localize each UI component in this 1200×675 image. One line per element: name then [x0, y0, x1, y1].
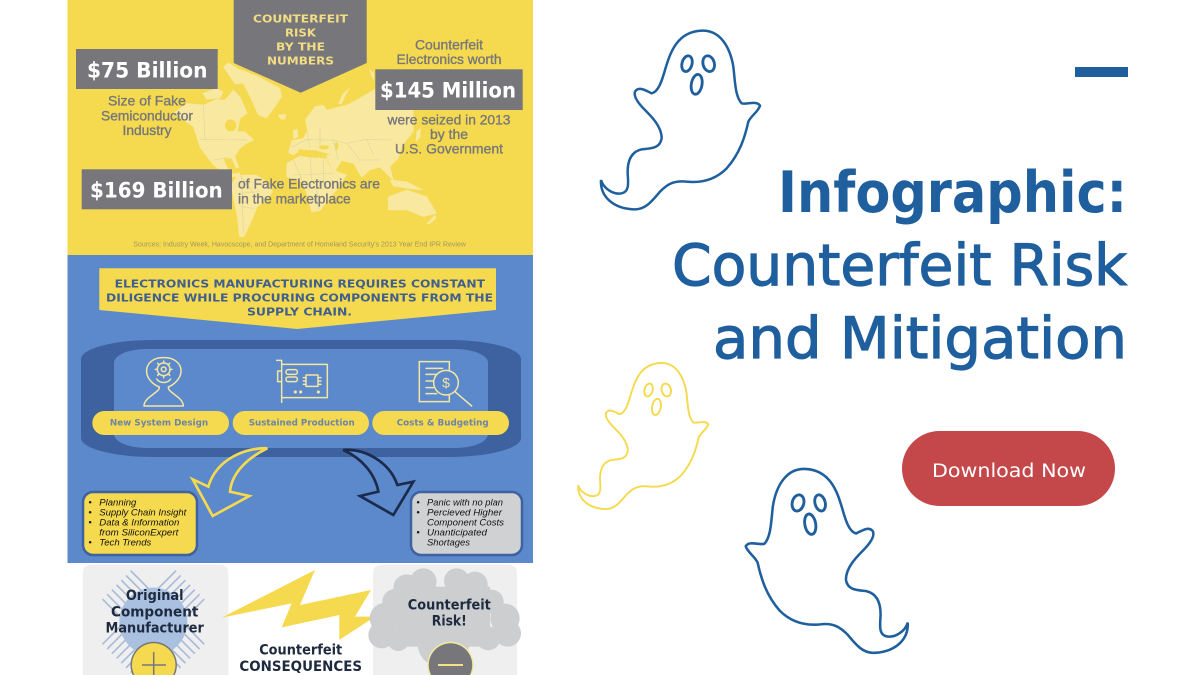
title [672, 160, 1127, 372]
button: download now: Download Now [932, 461, 1086, 482]
stat caption: counterfeit electronics worth [396, 36, 502, 67]
stat: 169 billion: $169 Billion [90, 178, 223, 202]
arrow: yellow curved down left [193, 448, 267, 516]
ghost: large blue top [601, 31, 760, 209]
list box: mitigation factors: • [88, 508, 92, 518]
list box: mitigation factors: Tech Trends [99, 537, 152, 547]
list box: risk factors: Shortages [427, 537, 470, 547]
list box: mitigation factors: • [88, 518, 92, 528]
pill: new system design: New System Design [110, 419, 208, 429]
stat: 169 billion [82, 169, 232, 209]
stat caption: size of fake semiconductor industry: Size of Fake [108, 93, 186, 109]
panel: original component manufacturer [80, 548, 228, 675]
icon: document with magnifier and dollar [419, 362, 472, 406]
list box: mitigation factors: Planning [99, 498, 137, 508]
icon: plus circle [131, 643, 176, 675]
list box: risk factors [411, 492, 522, 555]
list box: mitigation factors: • [88, 537, 92, 547]
title: Counterfeit Risk [672, 233, 1127, 299]
starburst motif [80, 548, 227, 675]
stat: 75 billion [76, 49, 218, 89]
panel: counterfeit risk by the numbers [68, 0, 533, 255]
stat caption: fake electronics in the marketplace: of Fake Electronics are [238, 176, 380, 192]
pill: costs and budgeting: Costs & Budgeting [397, 419, 489, 429]
icon: minus circle [428, 643, 473, 675]
stat caption: fake electronics in the marketplace [238, 176, 380, 206]
banner: counterfeit risk by the numbers: COUNTERFEIT [253, 14, 349, 26]
ghost: blue bottom mirrored [746, 469, 908, 653]
list box: risk factors: • [416, 498, 420, 508]
stat caption: seized in 2013 [387, 112, 511, 156]
banner: counterfeit risk by the numbers: BY THE [276, 42, 325, 54]
banner: counterfeit risk by the numbers [234, 0, 367, 93]
callout banner: electronics manufacturing [99, 268, 496, 329]
stat caption: size of fake semiconductor industry: Industry [122, 122, 172, 138]
icon: circuit board [277, 360, 327, 402]
label: original component manufacturer: Manufacturer [106, 620, 204, 636]
stat caption: size of fake semiconductor industry [101, 93, 193, 138]
pill: sustained production [233, 411, 369, 435]
arrow: dark curved down right [343, 450, 413, 515]
rounded frame [81, 340, 521, 457]
stat: 145 million: $145 Million [380, 78, 516, 102]
stat caption: size of fake semiconductor industry: Semiconductor [101, 107, 193, 123]
accent bar [1075, 67, 1128, 77]
pill: sustained production: Sustained Production [249, 419, 355, 429]
label: counterfeit risk: Risk! [432, 614, 467, 630]
label: counterfeit consequences: CONSEQUENCES [239, 659, 362, 675]
title: Infographic: [778, 160, 1127, 226]
panel: supply chain diligence [68, 255, 533, 563]
stat caption: seized in 2013: by the [430, 126, 468, 142]
stat caption: seized in 2013: U.S. Government [395, 140, 503, 156]
stat caption: seized in 2013: were seized in 2013 [387, 112, 511, 128]
pill: new system design [92, 411, 229, 435]
label: counterfeit risk: Counterfeit [408, 597, 491, 613]
stat: 75 billion: $75 Billion [87, 58, 208, 82]
list box: mitigation factors: • [88, 498, 92, 508]
label: counterfeit risk [408, 597, 491, 630]
list box: risk factors: • [416, 508, 420, 518]
lightning bolt [222, 570, 375, 640]
label: original component manufacturer: Component [111, 604, 199, 620]
callout banner: electronics manufacturing: SUPPLY CHAIN. [247, 306, 352, 319]
stat caption: fake electronics in the marketplace: in the marketplace [238, 190, 351, 206]
label: original component manufacturer [106, 588, 204, 636]
sources: Sources: Industry Week, Havocscope, and Department of Homeland Security's 2013 Year End IPR Review [133, 240, 467, 249]
button: download now [902, 431, 1115, 506]
label: counterfeit consequences [239, 643, 362, 675]
list box: risk factors: Unanticipated [427, 527, 488, 537]
cloud [368, 568, 521, 668]
list box: risk factors: • [416, 527, 420, 537]
list box: risk factors: Component Costs [427, 518, 504, 528]
callout banner: electronics manufacturing: DILIGENCE WHILE PROCURING COMPONENTS FROM THE [106, 292, 493, 305]
list box: mitigation factors: Data & Information [99, 518, 179, 528]
label: original component manufacturer: Original [126, 588, 184, 604]
ghost: yellow [578, 363, 708, 509]
label: counterfeit consequences: Counterfeit [259, 643, 342, 659]
icon: head with gear [144, 358, 183, 406]
list box: mitigation factors [83, 492, 197, 555]
stat caption: counterfeit electronics worth: Electronics worth [396, 51, 502, 67]
banner: counterfeit risk by the numbers: NUMBERS [267, 56, 334, 68]
stat: 145 million [375, 69, 523, 110]
list box: mitigation factors: from SiliconExpert [99, 527, 179, 537]
panel: counterfeit risk cloud [368, 565, 521, 675]
list box: risk factors: Percieved Higher [427, 508, 503, 518]
callout banner: electronics manufacturing: ELECTRONICS MANUFACTURING REQUIRES CONSTANT [115, 277, 485, 290]
banner: counterfeit risk by the numbers: RISK [285, 28, 317, 40]
stat caption: counterfeit electronics worth: Counterfeit [415, 36, 483, 52]
list box: risk factors: Panic with no plan [427, 498, 503, 508]
title: and Mitigation [713, 306, 1127, 372]
pill: costs and budgeting [372, 411, 509, 435]
world map [173, 63, 437, 237]
list box: mitigation factors: Supply Chain Insight [99, 508, 187, 518]
icon: document with magnifier and dollar: $ [442, 375, 450, 391]
